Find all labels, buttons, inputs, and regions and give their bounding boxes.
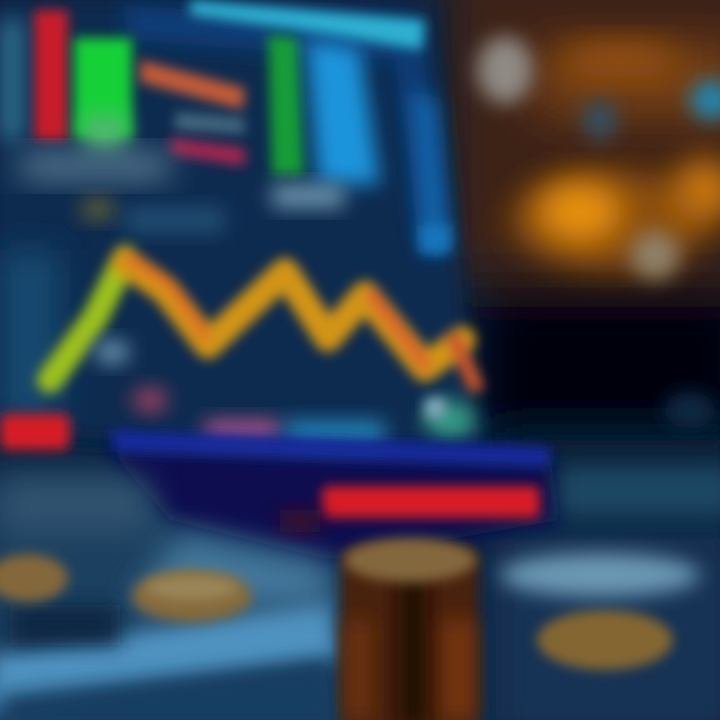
line chart: zigzag	[50, 258, 475, 385]
icon: coin stack	[342, 538, 478, 720]
panel: orange lights	[477, 36, 720, 279]
bar chart: monitor bars	[0, 10, 450, 253]
legend: screen lower markers	[0, 340, 476, 452]
panel: monitor screen	[0, 0, 480, 450]
icon: coins on desk	[0, 553, 700, 670]
panel: desk surface	[0, 392, 720, 720]
panel: monitor base	[105, 430, 560, 560]
